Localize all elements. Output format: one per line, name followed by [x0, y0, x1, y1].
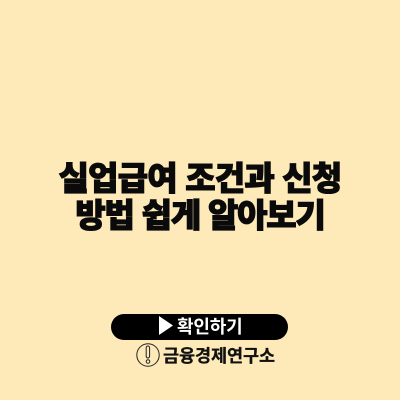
brand: [136, 343, 275, 367]
button: confirm: [111, 314, 288, 340]
brand name: 금융경제연구소: [163, 346, 275, 366]
button label: 확인하기: [177, 317, 242, 337]
icon: exclamation circle: [136, 343, 160, 367]
title: [58, 160, 341, 234]
icon: play triangle: [159, 316, 173, 335]
title line 2: 방법 쉽게 알아보기: [75, 197, 325, 234]
title line 1: 실업급여 조건과 신청: [59, 160, 341, 197]
